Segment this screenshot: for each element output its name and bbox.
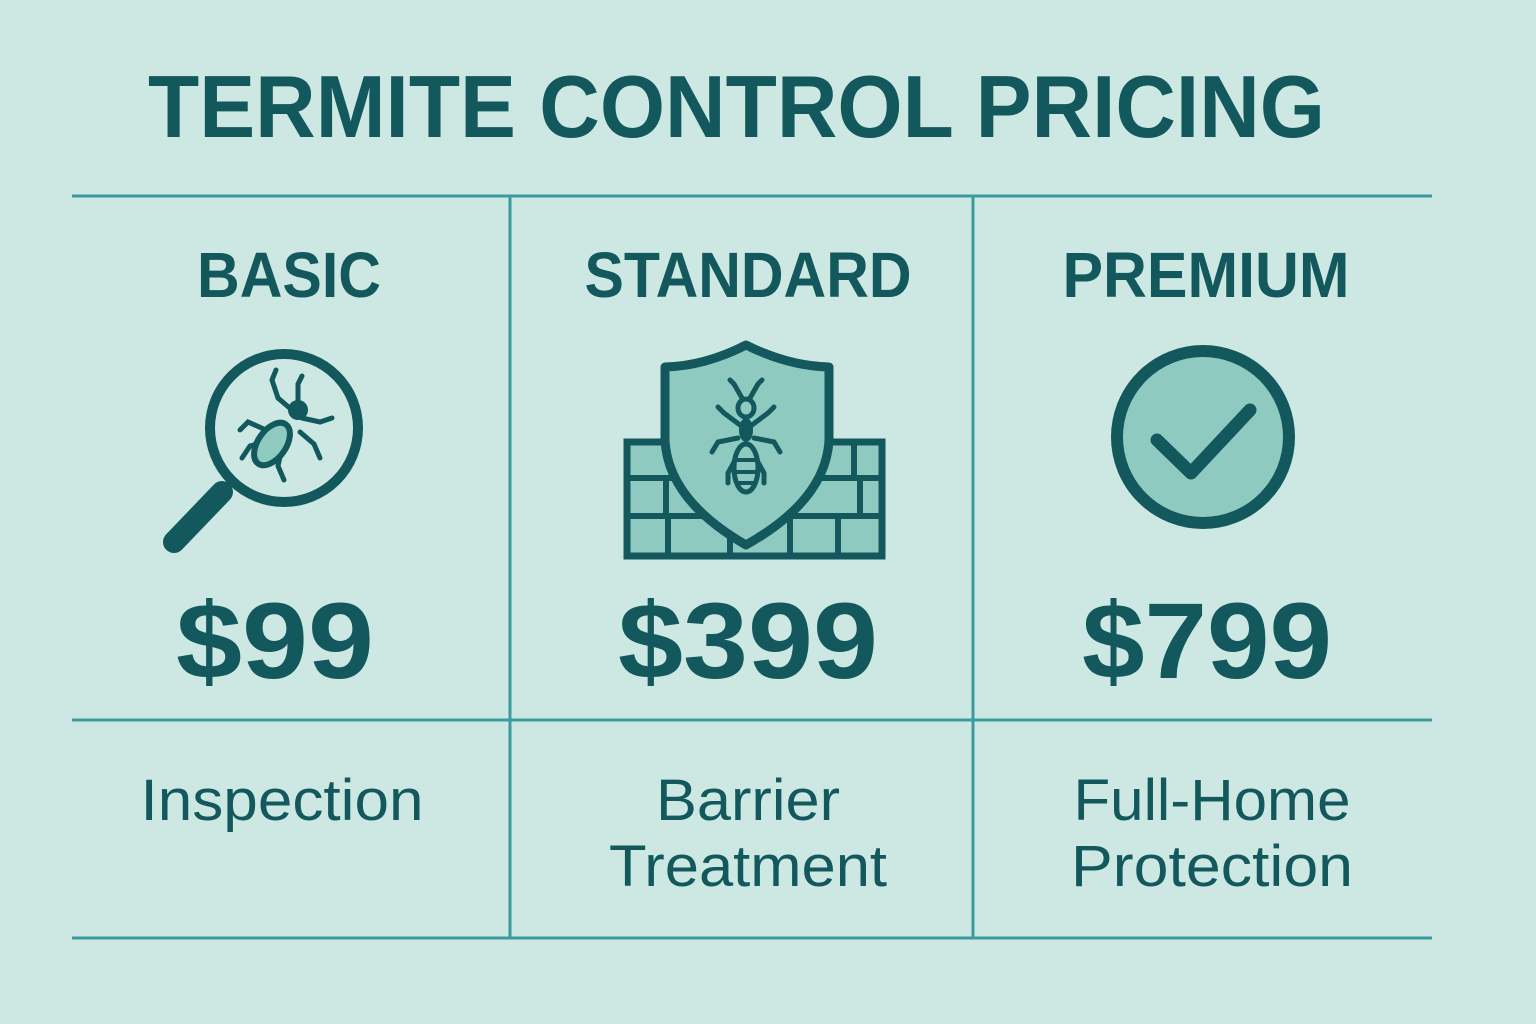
description: premium: Full-Home xyxy=(1074,768,1350,833)
heading: basic: BASIC xyxy=(197,239,381,311)
panel: premium: Protection xyxy=(1071,834,1353,899)
panel: premium xyxy=(1062,239,1353,899)
heading: premium: PREMIUM xyxy=(1062,239,1350,311)
title: TERMITE CONTROL PRICING xyxy=(148,57,1325,156)
panel: basic xyxy=(140,239,424,833)
icon: shield with brick wall xyxy=(627,345,882,556)
price: premium: $799 xyxy=(1082,580,1332,701)
icon: check circle xyxy=(1117,351,1289,523)
panel: standard xyxy=(584,239,912,899)
price: basic: $99 xyxy=(176,580,374,701)
description: standard: Barrier xyxy=(656,768,840,833)
price: standard: $399 xyxy=(618,580,878,701)
panel: standard: Treatment xyxy=(609,834,887,899)
icon: magnifier with bug xyxy=(174,354,358,542)
description: basic: Inspection xyxy=(140,768,424,833)
heading: standard: STANDARD xyxy=(584,239,912,311)
